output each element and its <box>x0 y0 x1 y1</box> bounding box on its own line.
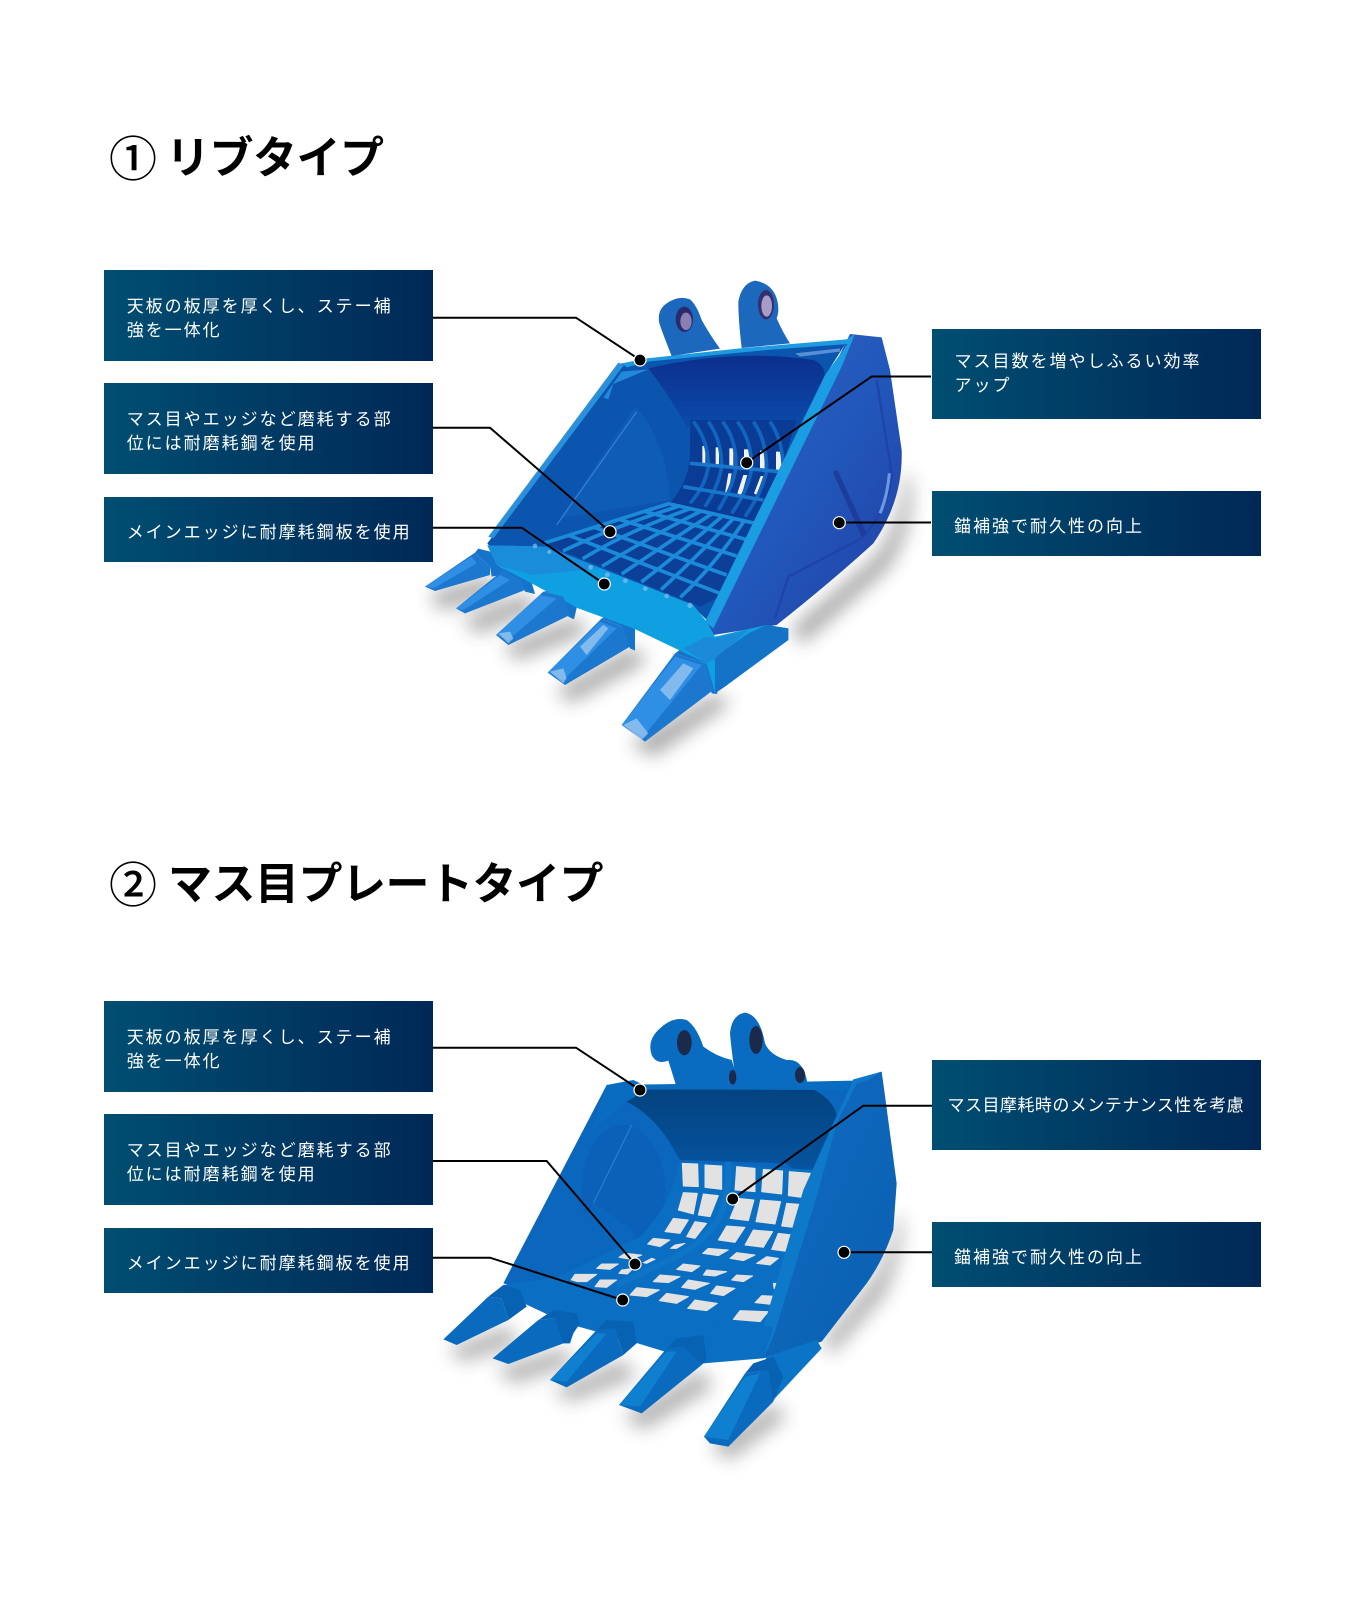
side plate <box>763 1072 897 1358</box>
mesh backdrop <box>558 1162 815 1327</box>
bucket shadow <box>448 1217 902 1460</box>
front edge plate <box>487 545 788 693</box>
number one: ① <box>109 134 157 187</box>
callout: top plate: 強を一体化 <box>127 321 222 340</box>
mounting ears <box>659 281 790 356</box>
callout: top plate: 強を一体化 <box>127 1052 222 1071</box>
callout: top plate <box>104 270 433 361</box>
callout: top plate <box>104 1001 433 1092</box>
heading text: リブタイプ <box>166 134 384 183</box>
leader lines: mesh plate type <box>433 1048 932 1300</box>
number two: ② <box>109 860 157 913</box>
teeth <box>425 553 713 742</box>
callout: more mesh <box>932 329 1260 419</box>
tooth adapters <box>488 1285 783 1402</box>
bucket photo: rib type <box>425 281 911 757</box>
callout: wear steel: マス目やエッジなど磨耗する部 <box>127 1141 393 1160</box>
callout: wear steel: 位には耐磨耗鋼を使用 <box>127 1165 317 1184</box>
callout: mesh maintenance <box>932 1060 1260 1150</box>
bucket shadow <box>430 473 911 757</box>
callout: anchor reinforcement <box>932 1222 1260 1287</box>
callout: main edge: メインエッジに耐摩耗鋼板を使用 <box>127 523 412 542</box>
callout: main edge <box>104 1228 433 1293</box>
leader dots: mesh plate type <box>617 1084 850 1306</box>
leader dots: rib type <box>598 354 845 590</box>
side strut <box>755 1072 882 1358</box>
callout: wear steel <box>104 1114 433 1205</box>
bucket interior <box>503 1082 853 1357</box>
floor grid <box>543 503 757 607</box>
callout: wear steel: マス目やエッジなど磨耗する部 <box>127 410 393 429</box>
callout: wear steel <box>104 383 433 474</box>
callout: mesh maintenance: マス目摩耗時のメンテナンス性を考慮 <box>948 1096 1244 1114</box>
heading: mesh plate type <box>109 860 603 913</box>
skid <box>760 1340 822 1400</box>
callout: anchor reinforcement: 錨補強で耐久性の向上 <box>954 1248 1144 1267</box>
back screen <box>670 420 797 523</box>
callout: main edge: メインエッジに耐摩耗鋼板を使用 <box>127 1254 412 1272</box>
callout: anchor reinforcement <box>932 490 1260 556</box>
mesh cells <box>570 1163 811 1322</box>
bucket interior <box>487 342 847 622</box>
side plate <box>705 334 902 635</box>
bucket photo: mesh plate type <box>443 1013 902 1460</box>
leader lines and dots: rib type <box>432 318 931 584</box>
callout: wear steel: 位には耐磨耗鋼を使用 <box>127 434 317 453</box>
heading: rib type <box>109 134 384 187</box>
front beam <box>503 1277 773 1363</box>
mounting ears <box>650 1013 807 1087</box>
top rim <box>592 1080 853 1130</box>
heading text: マス目プレートタイプ <box>168 860 603 909</box>
callout: top plate: 天板の板厚を厚くし、ステー補 <box>127 1028 393 1047</box>
callout: top plate: 天板の板厚を厚くし、ステー補 <box>127 297 393 316</box>
teeth <box>443 1297 773 1447</box>
callout: main edge <box>104 497 433 562</box>
callout: more mesh: マス目数を増やしふるい効率 <box>954 352 1202 371</box>
callout: more mesh: アップ <box>954 376 1012 395</box>
rim and struts <box>622 334 855 367</box>
tooth adapters <box>475 549 717 694</box>
callout: anchor reinforcement: 錨補強で耐久性の向上 <box>954 517 1144 536</box>
